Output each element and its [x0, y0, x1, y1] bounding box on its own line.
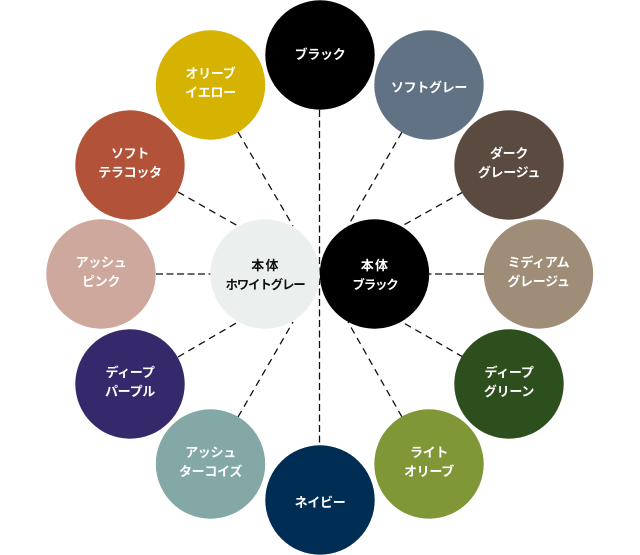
body colour: black: ブラック — [352, 277, 398, 292]
swatch: medium greige: ミディアム — [508, 255, 570, 270]
swatch: light olive — [374, 409, 484, 519]
body colour: white gray: 本体 — [251, 258, 280, 273]
swatch: deep green: グリーン — [484, 384, 534, 399]
swatch: dark greige: ダーク — [490, 146, 528, 161]
swatch: medium greige: グレージュ — [507, 274, 570, 289]
swatch: light olive: オリーブ — [404, 464, 454, 479]
body colour: black: 本体 — [361, 258, 389, 273]
swatch: deep purple — [75, 329, 185, 439]
swatch: olive yellow — [156, 30, 265, 140]
swatch: black: ブラック — [295, 47, 345, 62]
swatch: light olive: ライト — [410, 445, 448, 460]
swatch: olive yellow: イエロー — [185, 85, 236, 100]
swatch: soft terracotta: ソフト — [111, 146, 149, 161]
body colour: black — [320, 219, 429, 329]
swatch: deep purple: ディープ — [105, 365, 155, 380]
swatch: dark greige: グレージュ — [478, 165, 540, 180]
body colour: white gray — [210, 219, 320, 329]
swatch: soft terracotta — [75, 110, 185, 220]
dashed connector lines — [156, 110, 484, 446]
swatch: dark greige — [454, 110, 564, 220]
swatch: ash pink: ピンク — [82, 274, 120, 289]
swatch: navy: ネイビー — [295, 495, 345, 510]
swatch: soft gray — [374, 30, 484, 140]
swatch: soft gray: ソフトグレー — [391, 80, 467, 95]
body colour: white gray: ホワイトグレー — [225, 277, 305, 292]
swatch: ash turquoise — [156, 409, 265, 519]
swatch: ash turquoise: アッシュ — [185, 445, 236, 460]
swatch: ash turquoise: ターコイズ — [179, 464, 242, 479]
swatch: deep green: ディープ — [484, 365, 534, 380]
swatch: ash pink — [46, 219, 156, 329]
swatch: ash pink: アッシュ — [76, 255, 126, 270]
swatch: deep purple: パープル — [105, 384, 155, 399]
swatch: olive yellow: オリーブ — [185, 66, 236, 81]
swatch: navy — [265, 445, 375, 555]
swatch: medium greige — [484, 219, 593, 329]
swatch: soft terracotta: テラコッタ — [98, 165, 162, 180]
swatch: black — [265, 0, 375, 110]
swatch: deep green — [454, 329, 564, 439]
